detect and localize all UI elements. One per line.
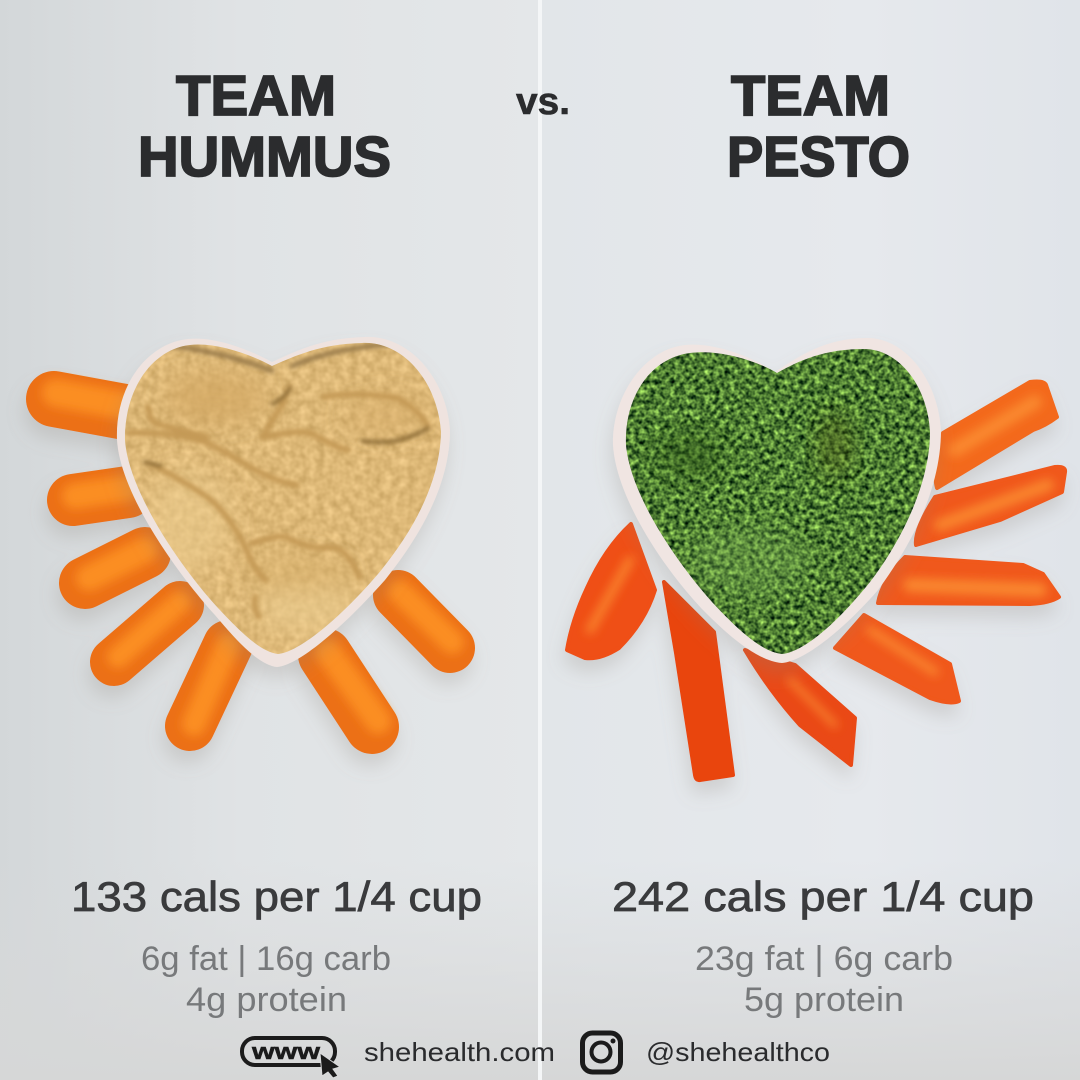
stats: hummus: 133 cals per 1/4 cup (71, 873, 482, 920)
stats: hummus: 6g fat | 16g carb (141, 940, 391, 978)
photo: red pepper strips (567, 381, 1065, 780)
panel: right background (541, 0, 1080, 1080)
stats: hummus (71, 873, 482, 1019)
heading: team hummus: HUMMUS (138, 125, 391, 189)
stats: pesto (612, 873, 1034, 1019)
pepper highlights (590, 402, 1048, 725)
heading: team hummus (138, 64, 391, 189)
hummus swirl shading (125, 343, 428, 617)
stats: hummus: 4g protein (186, 981, 347, 1019)
stats: pesto: 5g protein (744, 981, 904, 1019)
icon: instagram (582, 1033, 620, 1072)
photo: hummus heart bowl (110, 330, 455, 670)
footer: instagram handle: @shehealthco (646, 1037, 830, 1067)
stats: pesto: 23g fat | 6g carb (695, 940, 953, 978)
centre divider (538, 0, 542, 1080)
icon: www cursor: www (251, 1039, 321, 1064)
bottom shade (0, 860, 1080, 1080)
heading: vs.: vs. (516, 81, 570, 123)
photo: pesto heart bowl (613, 338, 941, 663)
heading: team pesto: PESTO (727, 125, 910, 189)
panel: left background (0, 0, 539, 1080)
photo: carrots (54, 393, 452, 727)
heading: team pesto (727, 64, 910, 189)
heading: team hummus: TEAM (176, 64, 336, 128)
icon: www cursor (242, 1038, 340, 1078)
footer: website: shehealth.com (364, 1037, 555, 1067)
heading: team pesto: TEAM (731, 64, 890, 128)
hummus tone patches (150, 372, 425, 634)
stats: pesto: 242 cals per 1/4 cup (612, 873, 1034, 920)
pesto shading (655, 433, 725, 477)
